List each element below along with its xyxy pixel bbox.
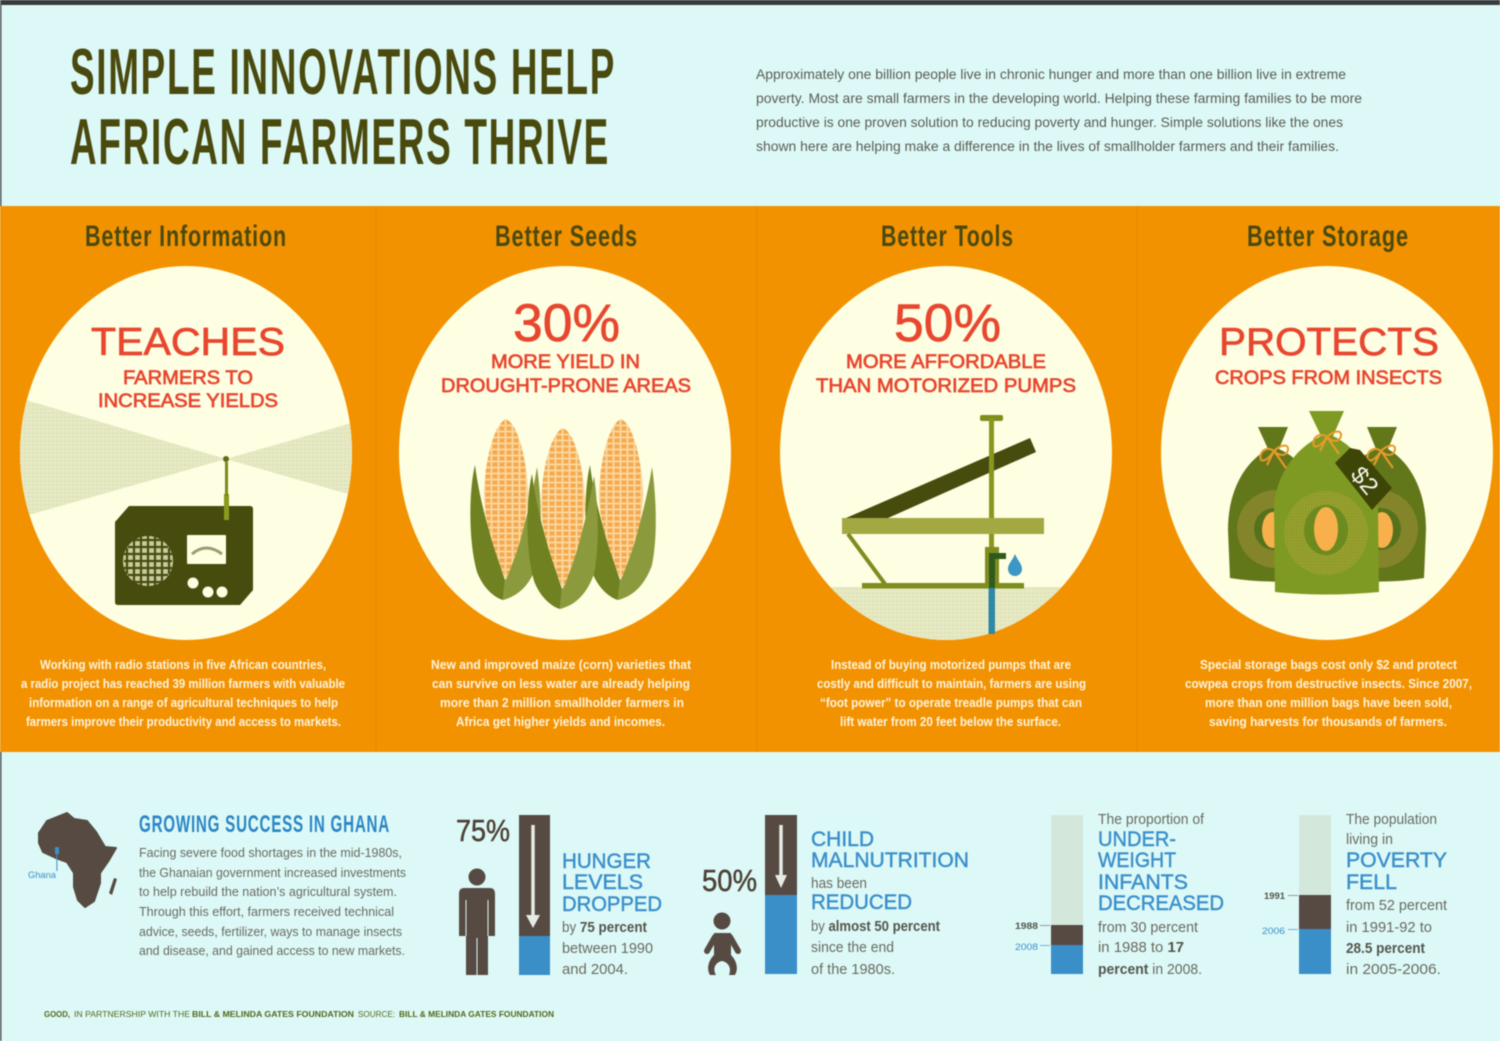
text block: malnutrition: of the 1980s. [811,961,895,978]
text block: poverty: in 2005-2006. [1346,961,1441,978]
body text: storage: saving harvests for thousands of farmers. [1209,715,1447,729]
text block: underweight: INFANTS [1098,871,1188,894]
intro text [756,66,1362,154]
icon: storage bags: $2 [1345,462,1384,500]
text block: poverty: from 52 percent [1346,897,1448,914]
icon: maize [470,419,656,609]
body text: seeds: Africa get higher yields and incomes. [456,715,665,729]
callout: teaches [91,321,285,412]
text block: malnutrition: REDUCED [811,891,912,914]
icon: africa map [28,813,117,907]
text block: malnutrition: by almost 50 percent [811,918,940,935]
text block: hunger: DROPPED [562,893,662,916]
orange band [0,206,1500,752]
text block: poverty: POVERTY [1346,849,1447,872]
footer credits [44,1009,554,1019]
text block: poverty: FELL [1346,871,1397,894]
radio beams [10,400,355,520]
intro text: poverty. Most are small farmers in the developing world. Helping these farming families to be more [756,90,1362,106]
body text: storage [1185,658,1472,729]
intro text: Approximately one billion people live in chronic hunger and more than one billion live in extreme [756,66,1346,82]
text block: poverty: in 1991-92 to [1346,919,1432,936]
text block: hunger [562,850,662,978]
body text: information: Working with radio stations in five African countries, [40,658,326,672]
text block: underweight: DECREASED [1098,892,1224,915]
body text: tools: “foot power” to operate treadle pumps that can [820,696,1082,710]
callout: teaches: INCREASE YIELDS [98,391,278,412]
icon: treadle pump [842,415,1044,634]
bar: poverty [1262,815,1331,974]
body text: tools: costly and difficult to maintain, farmers are using [817,677,1086,691]
footer credits: IN PARTNERSHIP WITH THE [74,1009,190,1019]
text block: poverty: living in [1346,831,1393,848]
panel: better storage [1161,220,1493,729]
callout: teaches: FARMERS TO [123,368,253,389]
text block: malnutrition: MALNUTRITION [811,849,969,872]
footer credits: SOURCE: [358,1009,395,1019]
body text: seeds: more than 2 million smallholder farmers in [440,696,684,710]
number: 50 percent: 50% [702,863,757,898]
text block: underweight: from 30 percent [1098,919,1199,936]
intro text: shown here are helping make a difference in the lives of smallholder farmers and their families. [756,138,1339,154]
body text: seeds: New and improved maize (corn) varieties that [431,658,692,672]
body text: storage: cowpea crops from destructive insects. Since 2007, [1185,677,1472,691]
title [70,35,616,178]
text block: underweight: UNDER- [1098,828,1176,851]
bar: underweight: 2008 [1015,942,1038,953]
callout: 50 percent: MORE AFFORDABLE [846,352,1046,373]
intro text: productive is one proven solution to reducing poverty and hunger. Simple solutions like the ones [756,114,1343,130]
bar: poverty: 1991 [1264,891,1286,902]
text block: ghana: to help rebuild the nation’s agricultural system. [139,884,397,899]
heading: better seeds: Better Seeds [495,220,638,253]
callout: protects: PROTECTS [1219,321,1439,364]
body text: storage: Special storage bags cost only $2 and protect [1200,658,1458,672]
callout: 50 percent: 50% [894,294,1001,353]
text block: hunger: HUNGER [562,850,651,873]
text block: ghana [139,845,406,958]
heading: better information: Better Information [85,220,287,253]
icon: radio [115,456,253,605]
callout: protects [1215,321,1442,389]
body text: tools [817,658,1086,729]
callout: 30 percent: DROUGHT-PRONE AREAS [441,376,691,397]
callout: 50 percent: THAN MOTORIZED PUMPS [816,376,1076,397]
stat: child malnutrition [702,815,969,978]
footer credits: BILL & MELINDA GATES FOUNDATION [192,1009,354,1019]
stat: hunger levels [456,813,662,978]
bar: hunger [519,815,550,975]
text block: malnutrition: has been [811,875,867,892]
panel: better tools [780,220,1112,729]
panel: better seeds [399,220,731,729]
callout: 30 percent: 30% [513,294,620,353]
text block: underweight: The proportion of [1098,811,1205,828]
text block: hunger: between 1990 [562,940,653,957]
heading: better storage: Better Storage [1247,220,1409,253]
text block: malnutrition [811,828,969,978]
callout: protects: CROPS FROM INSECTS [1215,368,1442,389]
callout: 30 percent: MORE YIELD IN [491,352,640,373]
footer credits: GOOD, [44,1009,70,1019]
text block: underweight: WEIGHT [1098,849,1176,872]
text block: ghana: the Ghanaian government increased investments [139,865,406,880]
circle: information [20,266,352,640]
text block: underweight: in 1988 to 17 [1098,939,1184,956]
icon: person [459,868,495,975]
text block: poverty: 28.5 percent [1346,940,1425,957]
text block: hunger: by 75 percent [562,919,647,936]
stat: underweight infants [1015,811,1224,978]
heading: growing success in ghana: GROWING SUCCESS IN GHANA [139,811,390,838]
text block: hunger: LEVELS [562,871,643,894]
bar: malnutrition [765,815,797,974]
title: SIMPLE INNOVATIONS HELP [70,35,616,108]
text block: underweight [1098,811,1224,978]
callout: 30 percent [441,294,691,397]
body text: seeds: can survive on less water are already helping [432,677,690,691]
text block: poverty: The population [1346,811,1437,828]
body text: information [21,658,345,729]
text block: poverty [1346,811,1448,978]
ground shading [831,586,1061,640]
body text: storage: more than one million bags have been sold, [1205,696,1452,710]
text block: ghana: Facing severe food shortages in the mid-1980s, [139,845,402,860]
panel: better information [10,220,355,729]
body text: information: information on a range of agricultural techniques to help [29,696,338,710]
circle: seeds [399,266,731,640]
bar: underweight: 1988 [1015,921,1038,932]
icon: africa map: Ghana [28,870,57,881]
body text: tools: Instead of buying motorized pumps that are [831,658,1071,672]
panel: growing success in ghana [28,811,406,958]
body text: tools: lift water from 20 feet below the surface. [840,715,1061,729]
text block: malnutrition: CHILD [811,828,874,851]
circle: tools [780,266,1112,640]
footer credits: BILL & MELINDA GATES FOUNDATION [399,1009,554,1019]
callout: 50 percent [816,294,1076,397]
body text: information: farmers improve their productivity and access to markets. [26,715,341,729]
number: 75 percent: 75% [456,813,510,848]
bar: poverty: 2006 [1262,926,1285,937]
title: AFRICAN FARMERS THRIVE [70,105,610,178]
text block: hunger: and 2004. [562,961,628,978]
circle: storage [1161,266,1493,640]
stat: poverty [1262,811,1448,978]
heading: better tools: Better Tools [881,220,1014,253]
text block: ghana: Through this effort, farmers received technical [139,904,394,919]
icon: baby [707,912,738,975]
text block: underweight: percent in 2008. [1098,961,1202,978]
body text: information: a radio project has reached 39 million farmers with valuable [21,677,345,691]
callout: teaches: TEACHES [91,321,285,364]
body text: seeds [431,658,692,729]
text block: ghana: and disease, and gained access to new markets. [139,943,405,958]
bar: underweight [1015,815,1083,974]
text block: ghana: advice, seeds, fertilizer, ways to manage insects [139,924,402,939]
text block: malnutrition: since the end [811,939,894,956]
icon: storage bags [1228,411,1426,594]
